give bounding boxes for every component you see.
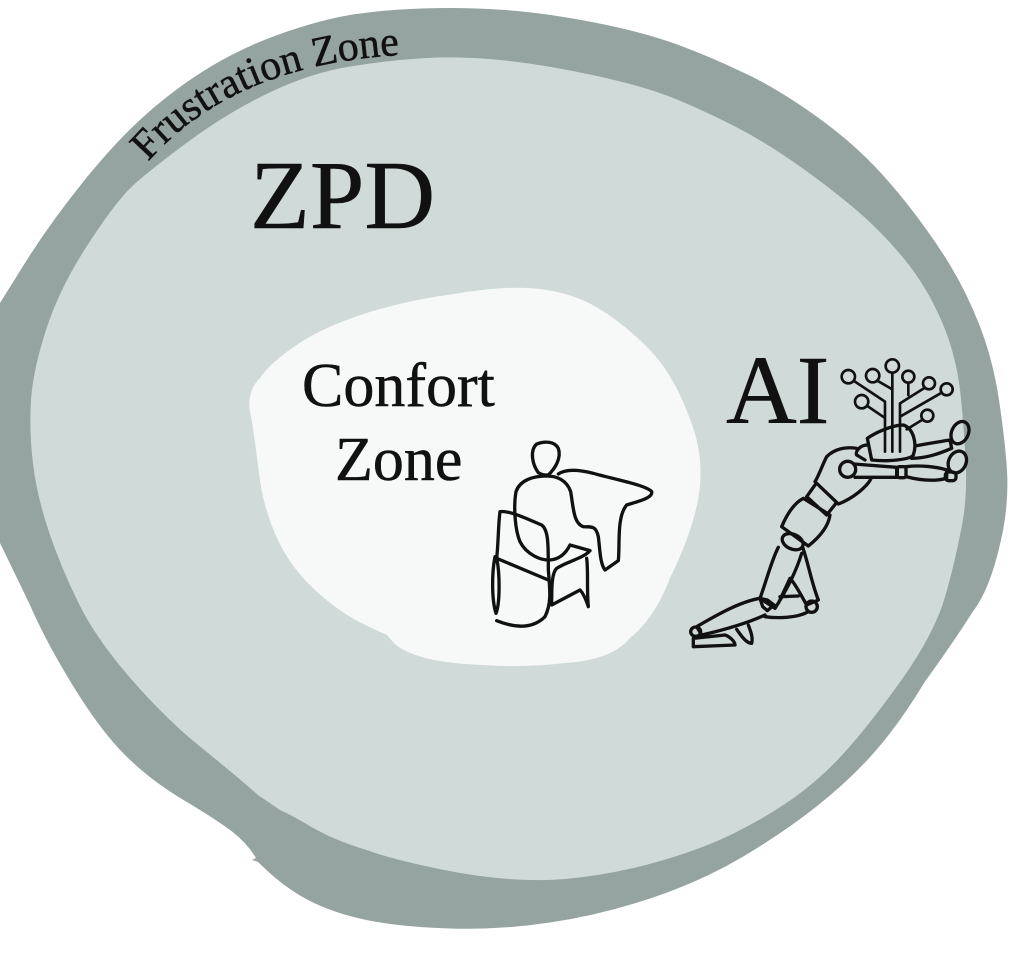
robot back arm xyxy=(912,419,972,458)
robot midsection xyxy=(807,485,836,515)
robot hip xyxy=(780,530,806,553)
heading: Confort Zone: Zone xyxy=(335,426,462,494)
robot lower torso xyxy=(782,498,830,546)
icon: circuit tree xyxy=(842,359,953,452)
robot front arm xyxy=(840,448,970,481)
robot ankle xyxy=(691,627,701,636)
robot shin xyxy=(697,598,765,635)
robot thighs xyxy=(760,547,818,608)
icon: person seated on chair xyxy=(493,442,652,626)
robot upper torso xyxy=(815,448,871,504)
robot head xyxy=(867,425,915,461)
heading: Confort Zone xyxy=(302,352,495,494)
icon: kneeling robot mannequin holding circuit brain xyxy=(691,359,972,647)
robot feet xyxy=(693,625,752,647)
robot knees xyxy=(760,598,774,611)
robot neck xyxy=(856,445,867,460)
heading: Confort Zone: Confort xyxy=(302,352,495,420)
heading: AI: AI xyxy=(726,337,829,445)
panel: ZPD inner blob xyxy=(30,57,966,880)
heading: ZPD: ZPD xyxy=(250,142,435,250)
robot calf xyxy=(765,596,808,618)
panel: comfort zone blob xyxy=(249,288,701,666)
heading: Frustration Zone: Frustration Zone xyxy=(128,35,398,161)
